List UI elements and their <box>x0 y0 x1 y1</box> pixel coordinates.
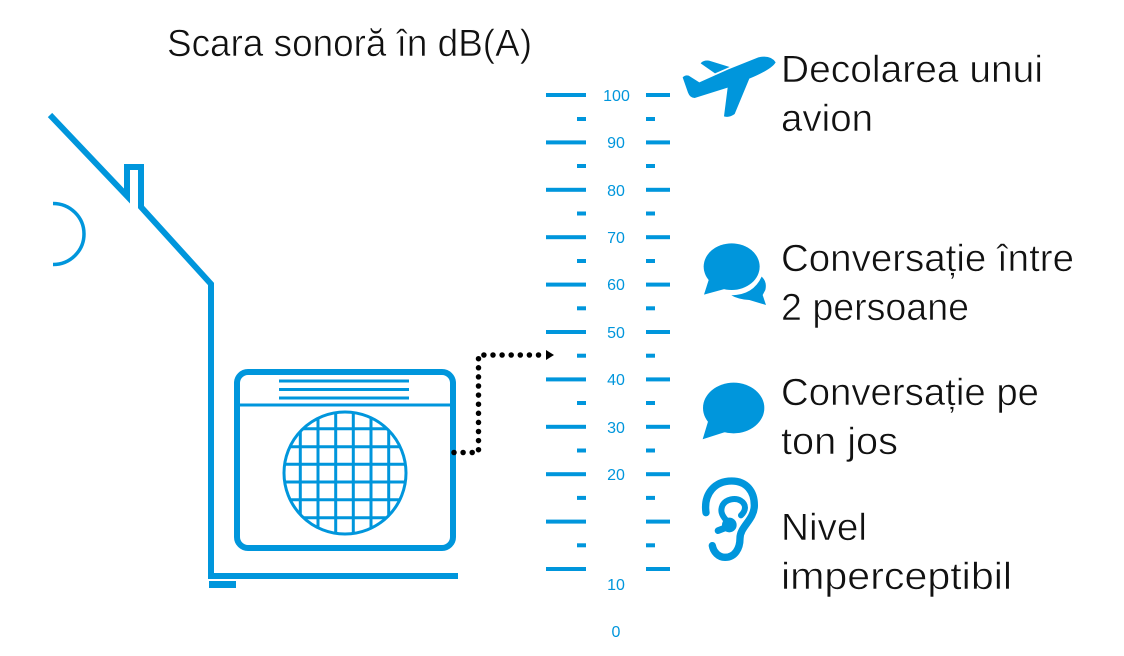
scale numbers: 50 <box>607 325 625 342</box>
scale numbers: 0 <box>612 624 621 641</box>
label: airplane takeoff <box>781 49 1043 140</box>
ground line <box>208 573 458 588</box>
icon: speech bubble <box>703 383 764 439</box>
label: imperceptible level <box>781 507 1012 598</box>
scale numbers <box>603 88 630 641</box>
label: conversation between 2 people: 2 persoane <box>781 287 969 329</box>
label: low voice conversation: ton jos <box>781 421 898 463</box>
label: low voice conversation: Conversație pe <box>781 372 1039 414</box>
window arc <box>53 203 84 264</box>
air conditioning unit <box>237 372 453 548</box>
label: imperceptible level: imperceptibil <box>781 556 1012 598</box>
icon: ear <box>706 481 754 557</box>
label: imperceptible level: Nivel <box>781 507 867 549</box>
scale numbers: 20 <box>607 467 625 484</box>
scale numbers: 40 <box>607 372 625 389</box>
scale numbers: 100 <box>603 88 630 105</box>
fan grille <box>283 410 407 536</box>
scale ticks <box>546 93 670 571</box>
icon: two speech bubbles <box>704 243 766 305</box>
title: Scara sonoră în dB(A) <box>167 23 532 65</box>
scale numbers: 30 <box>607 420 625 437</box>
house outline <box>50 115 211 579</box>
label: conversation between 2 people: Conversație între <box>781 238 1074 280</box>
label: conversation between 2 people <box>781 238 1074 329</box>
dotted arrow from unit to scale <box>454 350 554 452</box>
scale numbers: 70 <box>607 230 625 247</box>
label: airplane takeoff: avion <box>781 98 873 140</box>
scale numbers: 60 <box>607 277 625 294</box>
scale numbers: 10 <box>607 577 625 594</box>
vent lines <box>279 381 409 398</box>
icon: airplane <box>683 57 776 117</box>
scale numbers: 90 <box>607 135 625 152</box>
scale numbers: 80 <box>607 183 625 200</box>
label: low voice conversation <box>781 372 1039 463</box>
label: airplane takeoff: Decolarea unui <box>781 49 1043 91</box>
